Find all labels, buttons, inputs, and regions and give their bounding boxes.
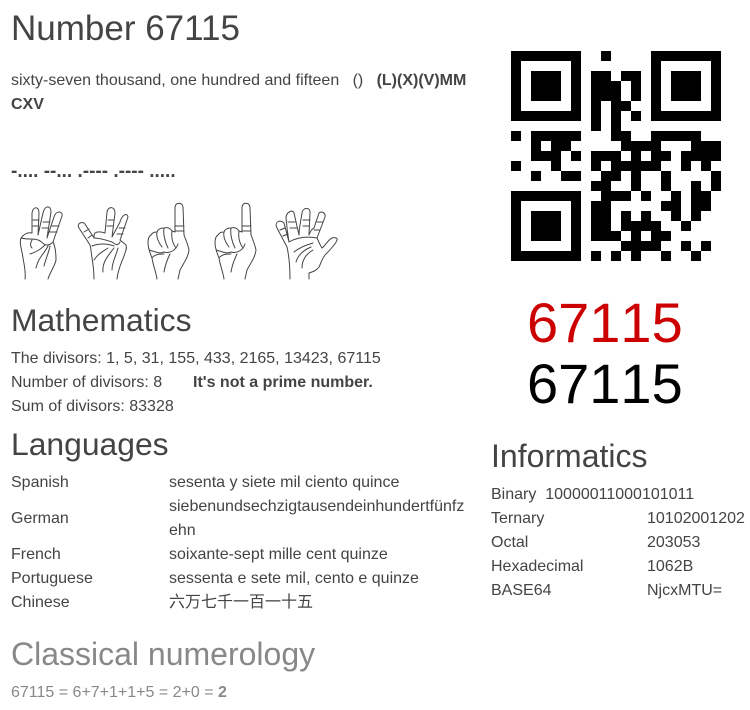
french: French xyxy=(11,546,61,563)
portuguese: Portuguese xyxy=(11,570,93,587)
ternary value: 10102001202 xyxy=(647,510,745,527)
french value: soixante-sept mille cent quinze xyxy=(169,546,388,563)
heading: informatics: Informatics xyxy=(491,438,647,474)
morse code: -.... --... .---- .---- ..... xyxy=(11,161,176,182)
german value: siebenundsechzigtausendeinhundertfünfz xyxy=(169,498,464,515)
hexadecimal: Hexadecimal xyxy=(491,558,583,575)
languages table xyxy=(11,474,464,611)
german value: ehn xyxy=(169,522,196,539)
spanish: Spanish xyxy=(11,474,69,491)
icon: hand six xyxy=(20,207,62,279)
heading: classical numerology: Classical numerology xyxy=(11,636,315,672)
octal: Octal xyxy=(491,534,528,551)
chinese: Chinese xyxy=(11,594,70,611)
octal value: 203053 xyxy=(647,534,700,551)
informatics table xyxy=(491,486,745,599)
binary: Binary 10000011000101011 xyxy=(491,486,694,503)
number in words and roman numeral xyxy=(11,72,466,113)
icon: hand one xyxy=(148,203,189,279)
german: German xyxy=(11,510,69,527)
spanish value: sesenta y siete mil ciento quince xyxy=(169,474,399,491)
german value xyxy=(169,498,464,539)
heading: languages: Languages xyxy=(11,426,169,462)
icon: finger-counting hands xyxy=(20,202,338,280)
hexadecimal value: 1062B xyxy=(647,558,693,575)
title: Number 67115 xyxy=(11,9,240,48)
sum of divisors: Sum of divisors: 83328 xyxy=(11,398,174,415)
divisors list: The divisors: 1, 5, 31, 155, 433, 2165, 13423, 67115 xyxy=(11,350,381,367)
number in words and roman numeral: CXV xyxy=(11,96,44,113)
numerology calculation: 67115 = 6+7+1+1+5 = 2+0 = 2 xyxy=(11,684,227,701)
base64: BASE64 xyxy=(491,582,551,599)
number in black: 67115 xyxy=(527,352,683,415)
number of divisors: Number of divisors: 8 xyxy=(11,374,162,391)
chinese value: 六万七千一百一十五 xyxy=(169,594,313,611)
mathematics facts xyxy=(11,350,381,415)
icon: hand one second xyxy=(215,203,256,279)
number in red: 67115 xyxy=(527,291,683,354)
number in words and roman numeral: sixty-seven thousand, one hundred and fifteen () (L)(X)(V)MM xyxy=(11,72,466,89)
QR code xyxy=(511,51,721,261)
heading: mathematics: Mathematics xyxy=(11,302,192,338)
base64 value: NjcxMTU= xyxy=(647,582,722,599)
icon: hand five xyxy=(276,208,337,279)
ternary: Ternary xyxy=(491,510,544,527)
portuguese value: sessenta e sete mil, cento e quinze xyxy=(169,570,419,587)
icon: hand seven xyxy=(78,208,128,279)
prime status: It's not a prime number. xyxy=(193,374,373,391)
